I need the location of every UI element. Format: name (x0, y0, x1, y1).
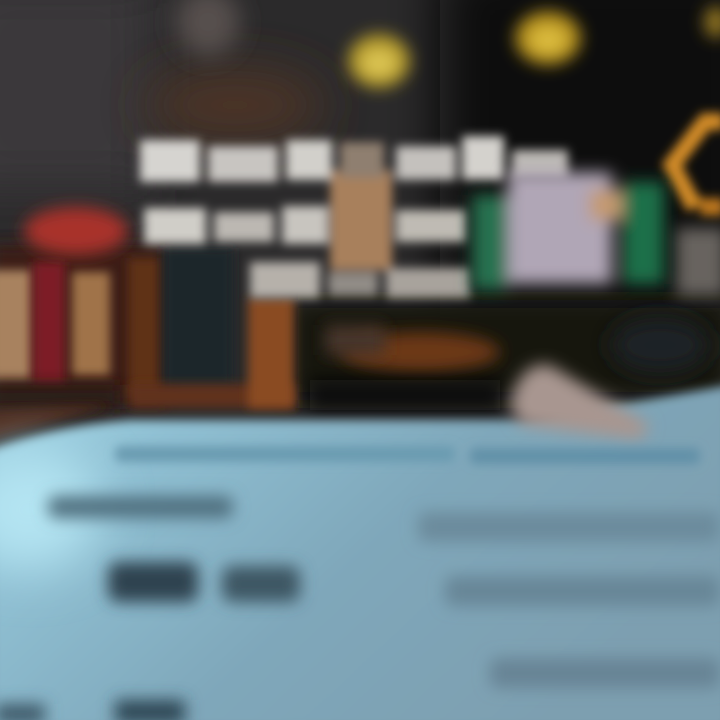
icon: orange hexagon (672, 113, 720, 216)
paper label two (108, 562, 300, 602)
paper glow (0, 450, 100, 570)
heading text block (140, 136, 568, 298)
dark display board (130, 248, 295, 408)
lamp far right (704, 6, 720, 38)
wood desk edge (0, 405, 110, 440)
heading coloured flags (472, 172, 664, 290)
hand (510, 364, 650, 440)
desk objects (310, 317, 710, 410)
paper label one (48, 496, 233, 518)
lamp left (348, 34, 410, 88)
bookshelf: left unit (0, 207, 165, 409)
paper text column (418, 512, 720, 688)
paper heading line (115, 446, 700, 464)
right side panel (676, 228, 720, 296)
lamp right (515, 11, 581, 65)
paper footer text (0, 700, 185, 720)
paper sheet (0, 385, 720, 720)
